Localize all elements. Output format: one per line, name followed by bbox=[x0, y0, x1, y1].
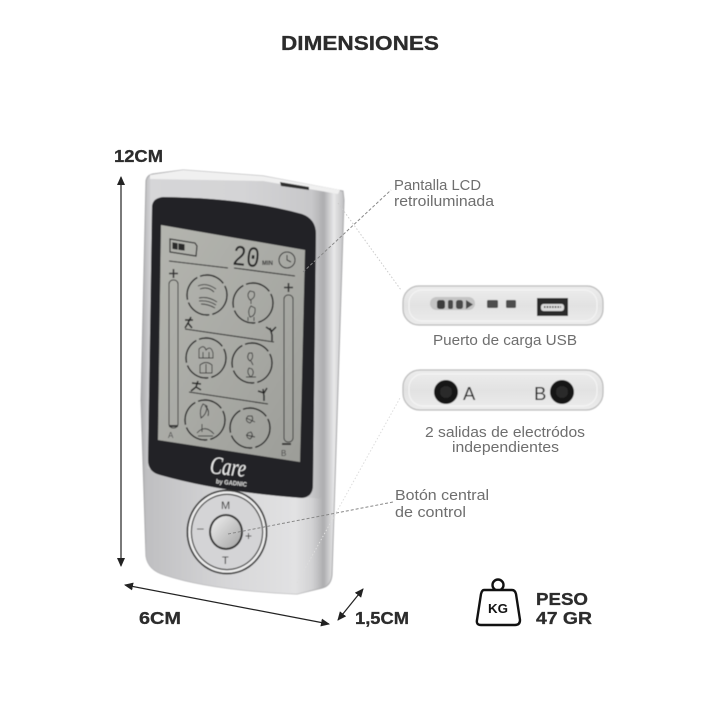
panel: electrode outputs bbox=[403, 370, 603, 410]
switch slider bbox=[430, 297, 475, 310]
callout: LCD bbox=[394, 178, 495, 210]
channel letter B: B bbox=[281, 449, 286, 458]
clock icon bbox=[279, 252, 295, 268]
black face bbox=[148, 197, 316, 498]
ring minus: – bbox=[197, 521, 204, 535]
USB socket bbox=[537, 298, 568, 316]
lcd divider lines bbox=[169, 261, 295, 404]
leader line: LCD bbox=[303, 190, 391, 272]
body zone circles bbox=[185, 275, 273, 448]
ring letter T: T bbox=[222, 555, 229, 567]
panel: USB port bbox=[403, 286, 603, 325]
letter B: B bbox=[534, 383, 546, 404]
body zone figures bbox=[197, 285, 256, 439]
center button bbox=[209, 514, 243, 550]
control ring bbox=[186, 490, 268, 574]
dimension: 12CM: 12CM bbox=[114, 146, 163, 166]
callout: LCD: Pantalla LCD bbox=[394, 178, 481, 194]
timer 20: 20 bbox=[231, 241, 261, 276]
LCD screen bbox=[158, 225, 305, 462]
width arrow bbox=[125, 585, 329, 624]
weight text: PESO bbox=[536, 589, 588, 609]
dimension: 1,5CM bbox=[338, 589, 409, 628]
dimension: 6CM bbox=[125, 585, 329, 628]
leader line: button bbox=[228, 502, 393, 534]
dotted guide: outputs bbox=[297, 398, 400, 583]
callout: central button bbox=[395, 488, 489, 521]
dimension: 1,5CM: 1,5CM bbox=[355, 608, 409, 628]
ring letter M: M bbox=[221, 500, 230, 512]
KG label: KG bbox=[488, 601, 508, 616]
weight text bbox=[536, 589, 592, 628]
dimension: 6CM: 6CM bbox=[139, 608, 181, 628]
USB caption: Puerto de carga USB bbox=[433, 333, 577, 349]
callout: central button: Botón central bbox=[395, 488, 489, 504]
channel letter A: A bbox=[168, 431, 174, 440]
title: DIMENSIONES bbox=[281, 32, 439, 55]
Care logo: Care bbox=[209, 452, 247, 483]
by Gadnic logo: by GADNIC bbox=[216, 478, 247, 489]
dotted guide: USB port bbox=[338, 203, 401, 290]
letter A: A bbox=[463, 383, 476, 404]
exercise figures bbox=[185, 317, 276, 401]
MIN label: MIN bbox=[262, 261, 273, 267]
device top highlight bbox=[150, 170, 340, 194]
device illustration bbox=[141, 170, 344, 594]
device body bbox=[141, 170, 344, 594]
jack A bbox=[434, 380, 458, 404]
battery icon bbox=[170, 239, 197, 256]
outputs caption: independientes bbox=[452, 440, 559, 456]
indicator squares bbox=[487, 300, 516, 308]
weight text: 47 GR bbox=[536, 608, 592, 628]
outputs caption: 2 salidas de electródos bbox=[425, 425, 585, 441]
callout: central button: de control bbox=[395, 505, 466, 521]
device top port edge bbox=[280, 182, 309, 190]
icon: weight bbox=[477, 580, 520, 625]
level bar A bbox=[169, 269, 178, 428]
jack B bbox=[550, 380, 574, 404]
depth arrow bbox=[338, 589, 363, 620]
level bar B bbox=[282, 283, 293, 444]
ring plus: + bbox=[245, 529, 252, 543]
outputs caption bbox=[425, 425, 585, 456]
device lower silver shade bbox=[146, 468, 322, 594]
height arrow bbox=[120, 177, 122, 566]
callout: LCD: retroiluminada bbox=[394, 194, 495, 210]
